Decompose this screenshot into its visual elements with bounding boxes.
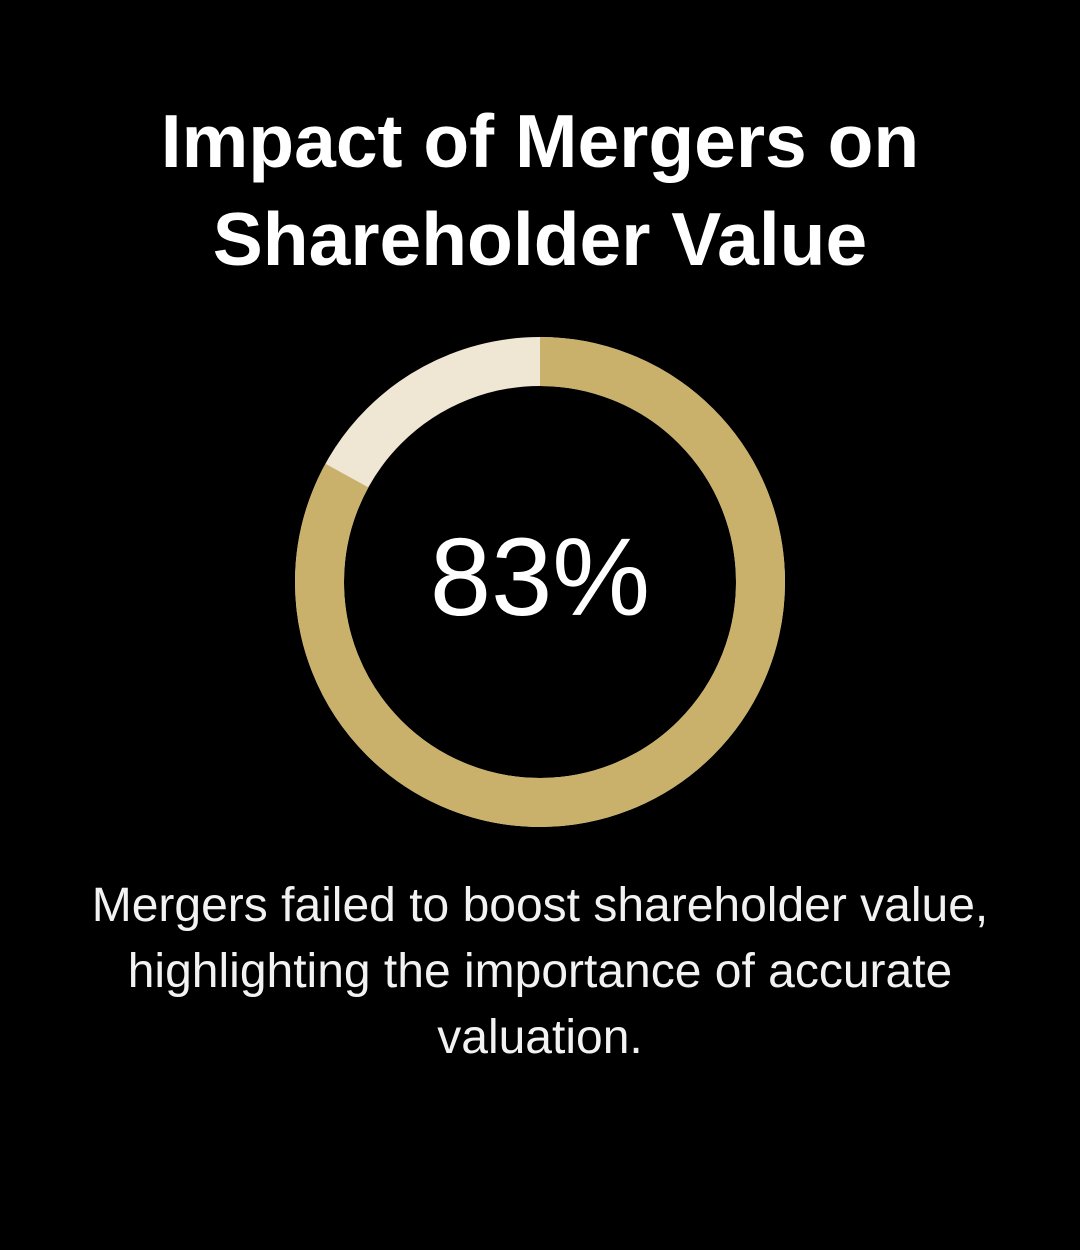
title: Impact of Mergers on	[161, 99, 919, 183]
title: Shareholder Value	[213, 197, 867, 281]
ring: remaining 17%	[320, 362, 760, 802]
description text: highlighting the importance of accurate	[128, 945, 952, 998]
description text: Mergers failed to boost shareholder value,	[92, 879, 988, 932]
description text	[92, 879, 988, 1064]
donut chart	[295, 337, 785, 827]
title	[161, 99, 919, 281]
description text: valuation.	[437, 1011, 643, 1064]
ring: 83% segment	[320, 362, 760, 802]
percentage label: 83%	[430, 516, 650, 639]
